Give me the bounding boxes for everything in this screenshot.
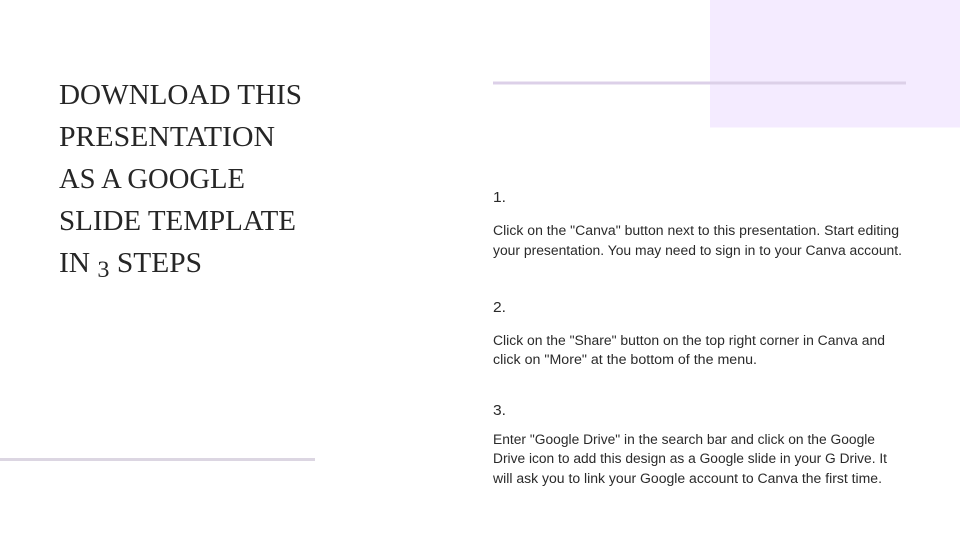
title: STEPS	[110, 248, 202, 279]
step 2 text	[493, 333, 885, 367]
title: DOWNLOAD THIS	[59, 80, 302, 111]
step 1 number: 1.	[493, 189, 506, 206]
panel: lilac corner block	[710, 0, 960, 128]
step 3 text: Enter "Google Drive" in the search bar and click on the Google	[493, 432, 875, 447]
title: 3	[97, 257, 110, 282]
title: AS A GOOGLE	[59, 164, 245, 195]
step 1 text	[493, 223, 902, 258]
title	[59, 80, 302, 282]
title: SLIDE TEMPLATE	[59, 206, 296, 237]
step 3 text: Drive icon to add this design as a Google slide in your G Drive. It	[493, 451, 887, 466]
title: IN	[59, 248, 89, 279]
step 3 text	[492, 432, 887, 486]
step 2 text: Click on the "Share" button on the top right corner in Canva and	[493, 333, 885, 348]
step 3 text: will ask you to link your Google account to Canva the first time.	[492, 471, 882, 486]
bottom accent line	[0, 458, 315, 461]
step 1 text: your presentation. You may need to sign in to your Canva account.	[493, 243, 902, 258]
top accent line	[493, 82, 906, 84]
step 2	[493, 299, 885, 367]
step 3 number: 3.	[493, 402, 506, 419]
title: PRESENTATION	[59, 122, 275, 153]
step 2 number: 2.	[493, 299, 506, 316]
step 1	[493, 189, 902, 258]
step 2 text: click on "More" at the bottom of the menu.	[493, 352, 757, 367]
step 1 text: Click on the "Canva" button next to this presentation. Start editing	[493, 223, 899, 238]
step 3	[492, 402, 887, 486]
